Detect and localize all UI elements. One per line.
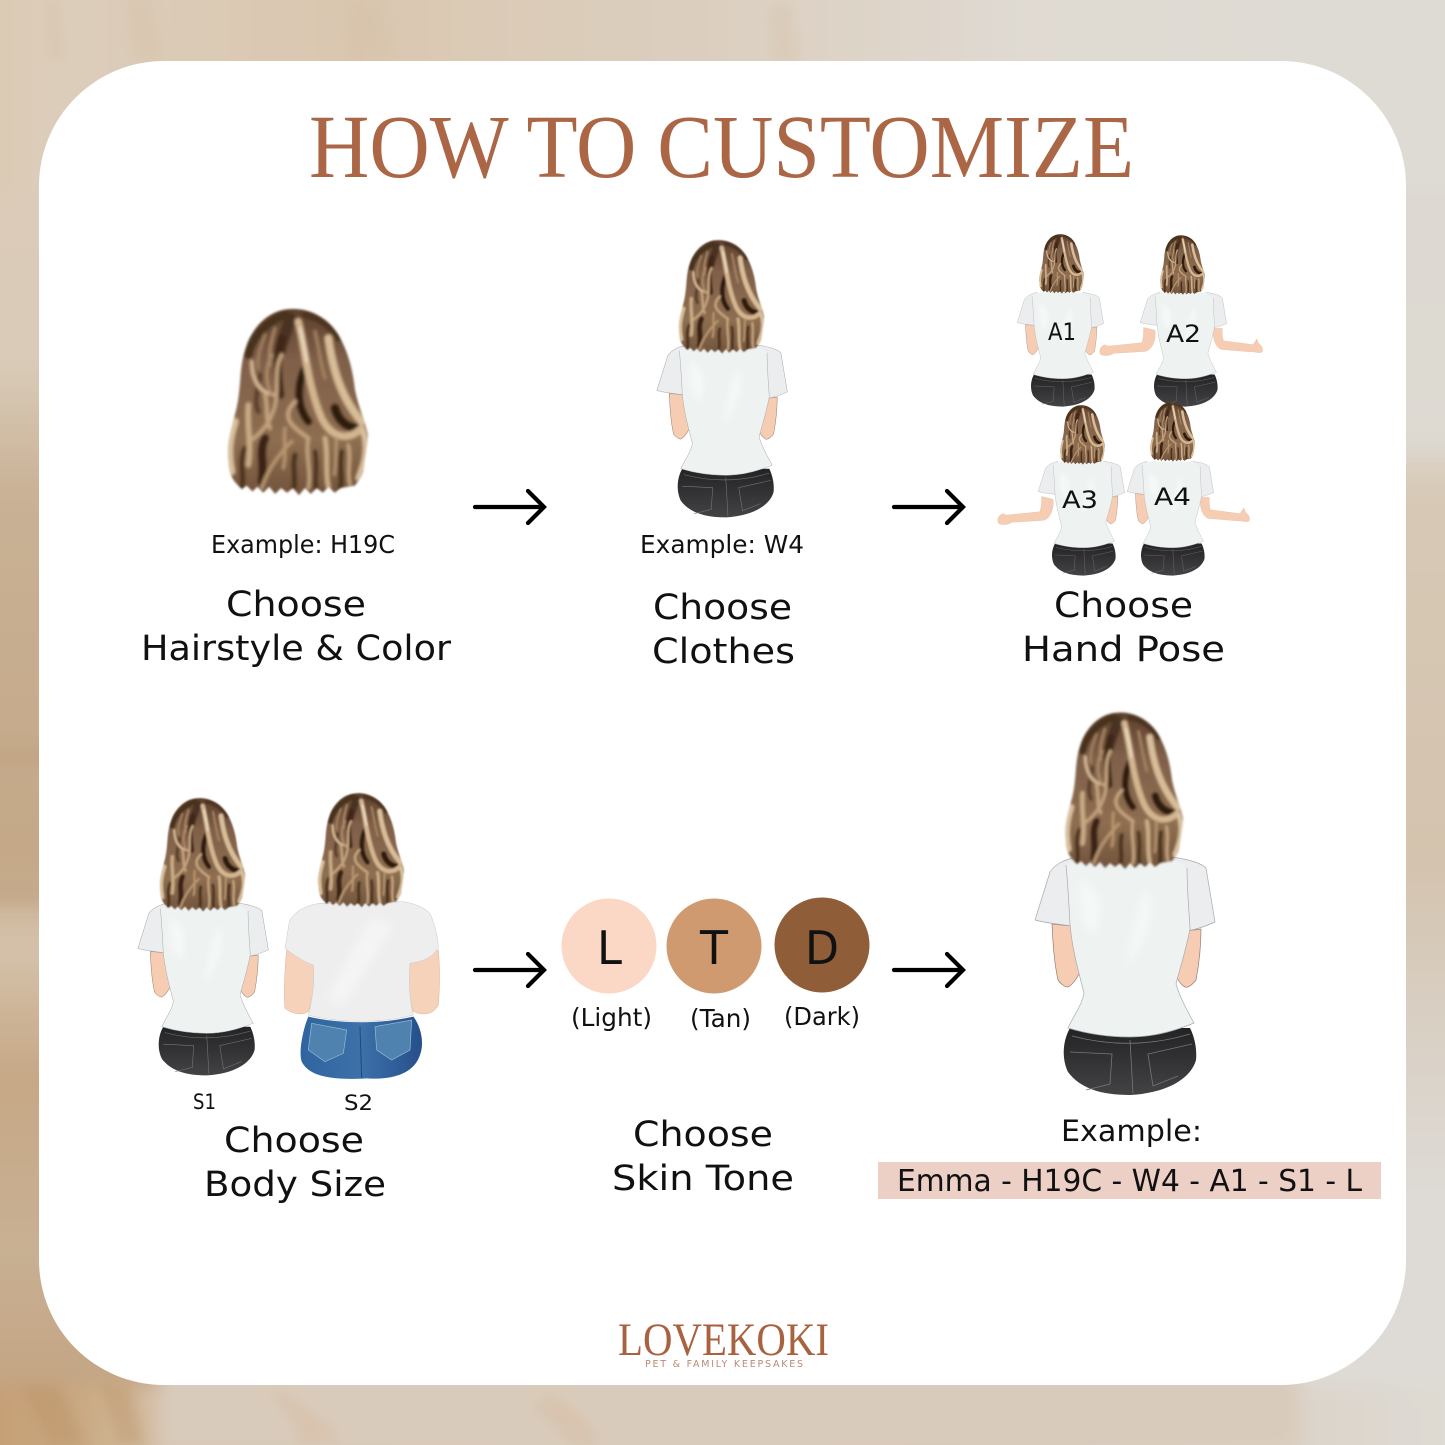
pose labels: A3 — [1062, 486, 1098, 514]
arrow 3 — [475, 954, 544, 986]
swatch captions: (Light) — [571, 1003, 652, 1032]
swatch light — [562, 898, 656, 994]
heading: choose hand pose: Hand Pose — [1022, 630, 1225, 670]
swatch captions: (Tan) — [690, 1004, 751, 1033]
arrow 4 — [894, 954, 963, 986]
swatch dark — [774, 898, 870, 992]
pose labels: A4 — [1154, 483, 1191, 511]
arrow 1 — [475, 491, 544, 523]
heading: choose skin tone: Skin Tone — [612, 1159, 794, 1199]
figure in clothes — [657, 237, 787, 517]
order code bar — [878, 1162, 1381, 1199]
final example — [878, 708, 1381, 1199]
example label W4: Example: W4 — [640, 530, 804, 559]
swatch captions: (Dark) — [784, 1002, 860, 1031]
heading: choose body size: Body Size — [204, 1165, 386, 1205]
heading: choose body size: Choose — [224, 1121, 364, 1161]
example label H19C: Example: H19C — [211, 530, 395, 559]
arrow 2 — [894, 491, 963, 523]
swatch letters — [597, 921, 839, 975]
final figure — [1035, 708, 1215, 1095]
size labels: S1 — [193, 1090, 216, 1114]
figure S2 — [284, 790, 440, 1079]
swatch letters: D — [805, 921, 839, 975]
heading: choose hairstyle and color: Hairstyle & Color — [141, 629, 452, 669]
heading: choose skin tone: Choose — [633, 1115, 773, 1155]
figure S1 — [138, 795, 268, 1075]
size labels — [193, 1090, 373, 1115]
heading: choose hand pose: Choose — [1054, 586, 1193, 626]
pose A1 — [1017, 232, 1104, 407]
step 2: clothes — [640, 237, 804, 672]
pose A4 — [1127, 400, 1250, 576]
pose A3 — [998, 403, 1125, 576]
swatch letters: T — [699, 921, 729, 975]
order code text: Emma - H19C - W4 - A1 - S1 - L — [897, 1164, 1362, 1199]
step 1: hairstyle and color — [141, 304, 452, 669]
heading: choose clothes: Choose — [653, 588, 792, 628]
swatch captions — [571, 1002, 860, 1033]
pose labels — [1048, 318, 1201, 514]
pose A2 — [1100, 234, 1263, 407]
step 5: skin tone — [562, 898, 870, 1199]
pose labels: A2 — [1166, 320, 1201, 348]
pose labels: A1 — [1048, 318, 1076, 346]
logo: PET & FAMILY KEEPSAKES — [645, 1359, 803, 1370]
size labels: S2 — [344, 1091, 373, 1115]
heading: choose clothes: Clothes — [652, 632, 795, 672]
step 4: body size — [138, 790, 440, 1205]
example label: Example: — [1061, 1114, 1202, 1148]
logo: LOVEKOKI — [618, 1314, 829, 1366]
icon: hair sample — [222, 304, 376, 500]
heading: choose hairstyle and color: Choose — [226, 585, 366, 625]
step 3: hand pose — [998, 232, 1263, 670]
title: HOW TO CUSTOMIZE — [309, 98, 1134, 197]
swatch letters: L — [597, 921, 622, 975]
swatch tan — [666, 898, 762, 994]
